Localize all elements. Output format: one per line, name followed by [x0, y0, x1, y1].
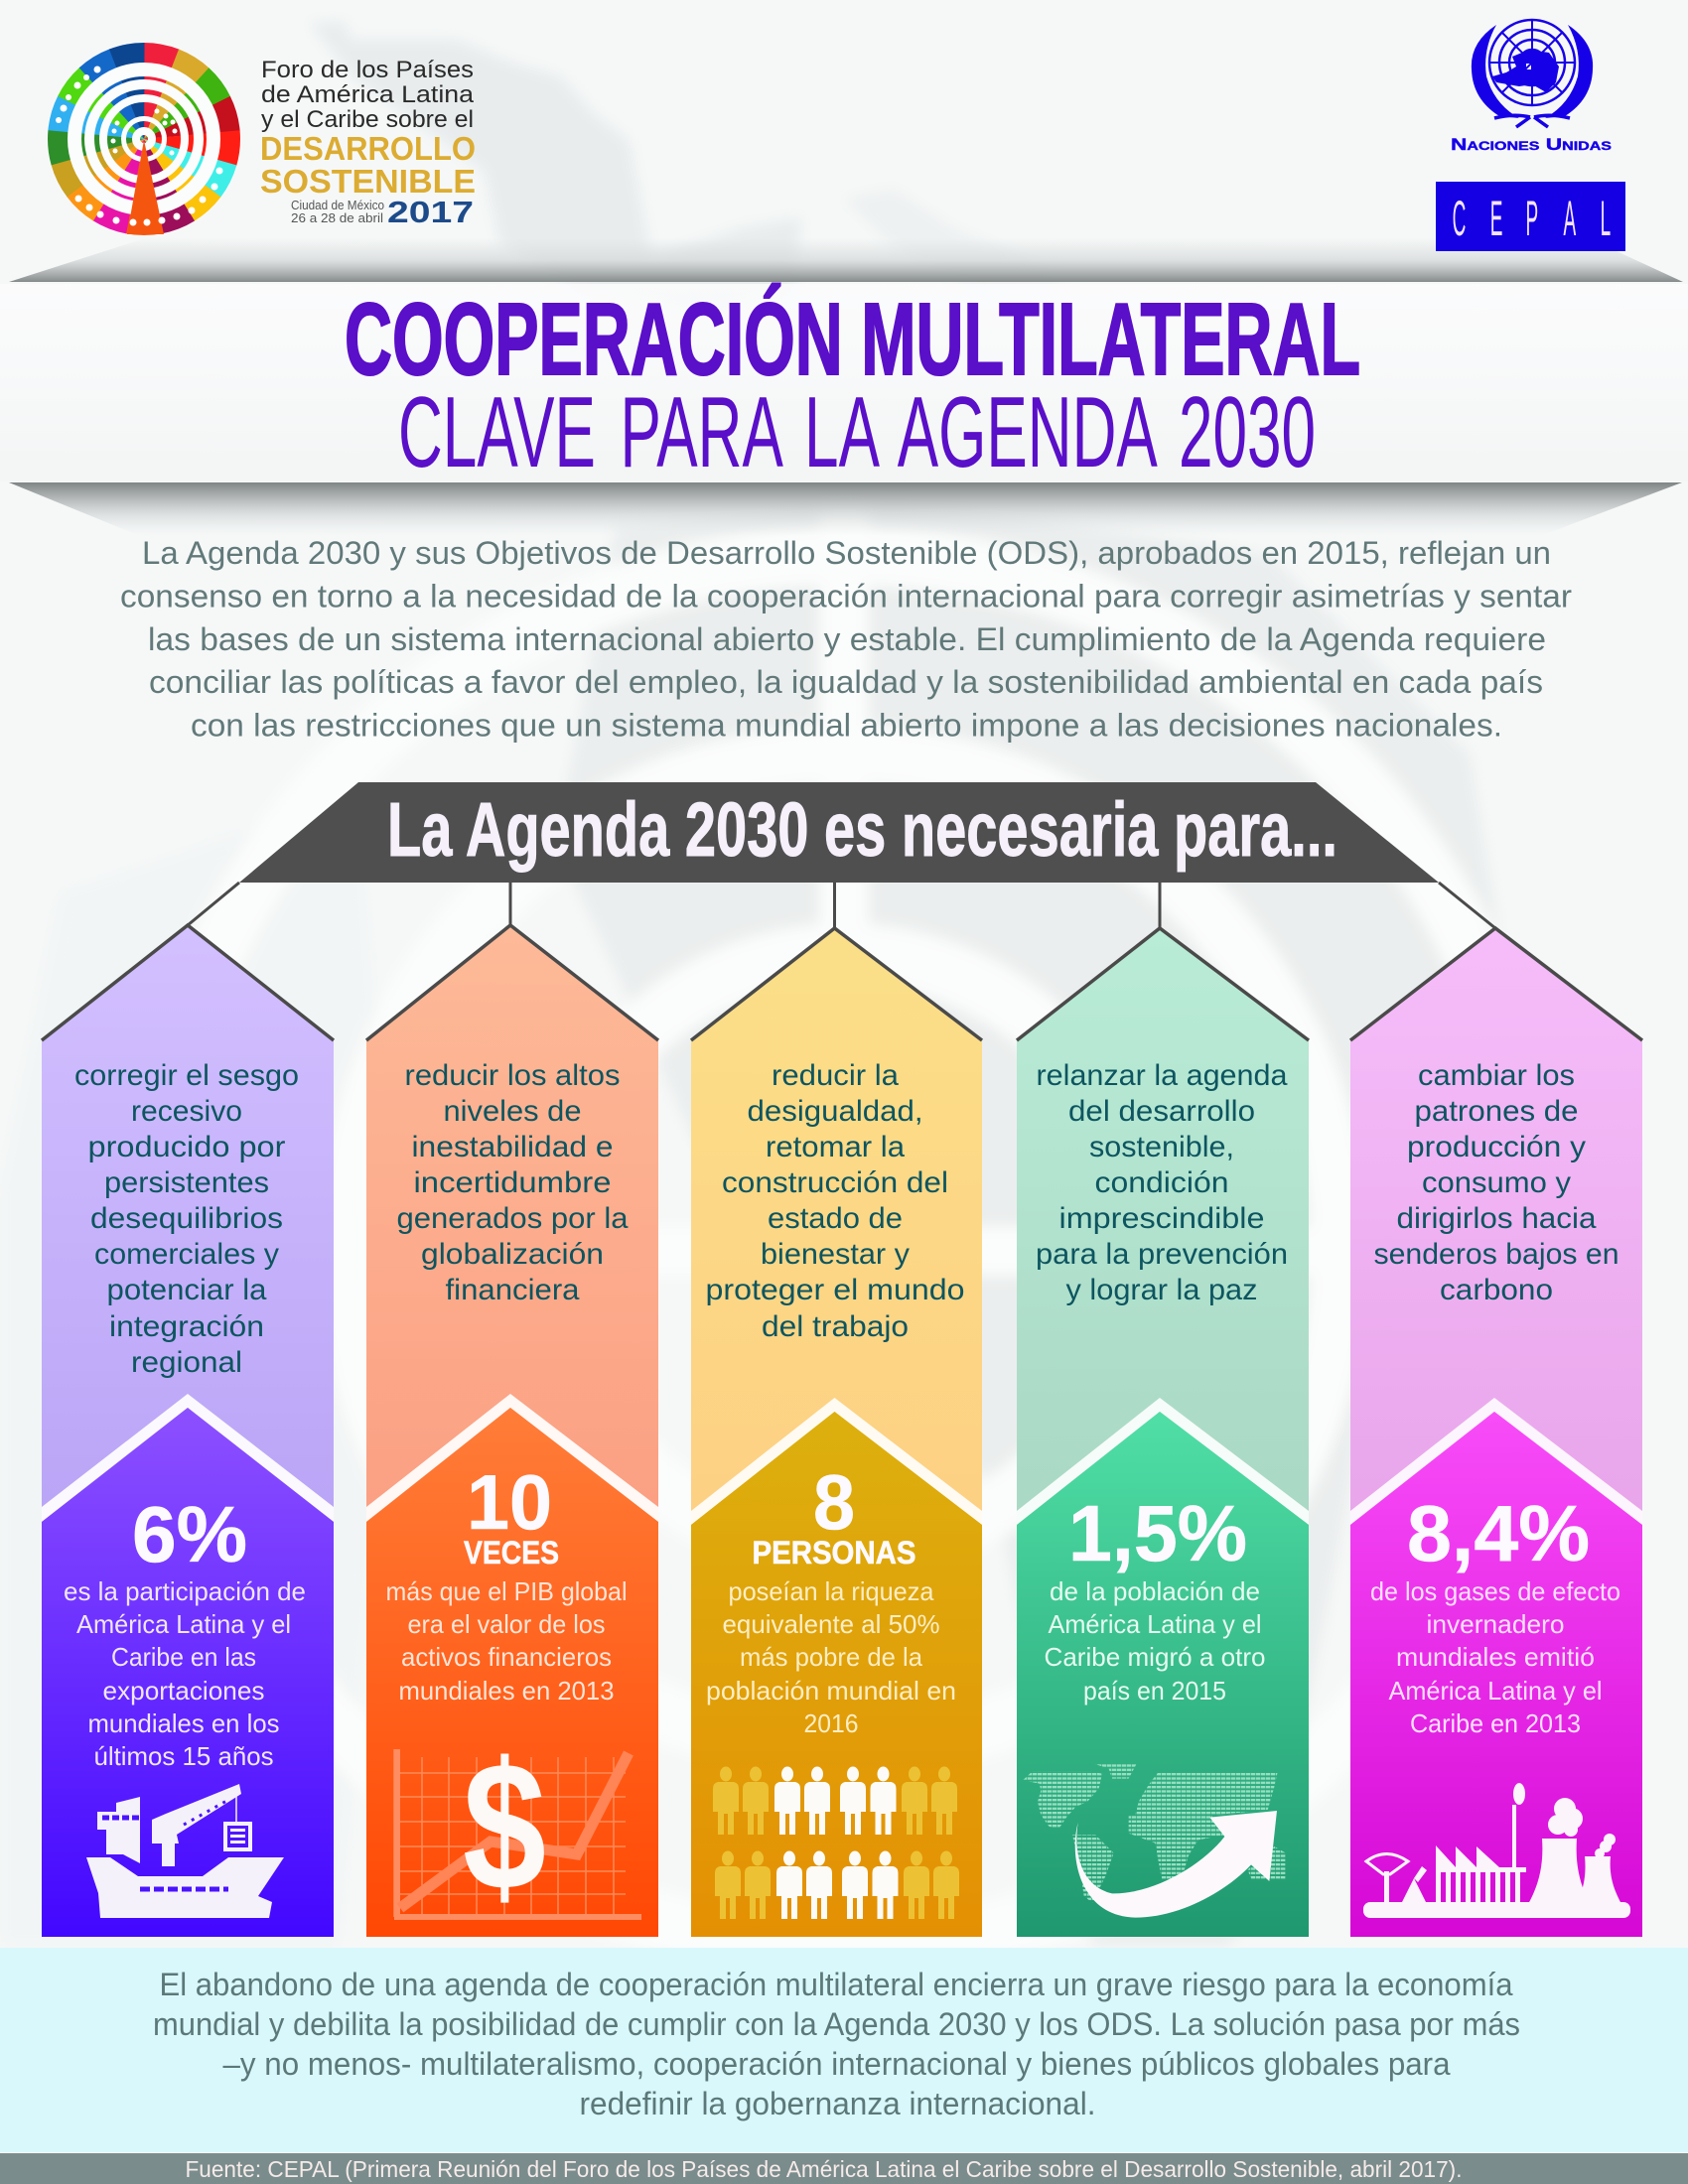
label Naciones Unidas: Naciones Unidas: [1451, 135, 1612, 154]
stat value: VECES: [464, 1535, 559, 1570]
upper text: proteger el mundo: [705, 1274, 965, 1306]
stat text: últimos 15 años: [93, 1741, 274, 1771]
stat text: es la participación de: [64, 1576, 306, 1606]
stat panel: [42, 1394, 334, 1522]
stat panel: [1350, 1398, 1642, 1525]
logo text: SOSTENIBLE: [260, 163, 476, 200]
stat text: [64, 1576, 306, 1771]
stat value: PERSONAS: [753, 1535, 915, 1570]
icon: dollar chart: [394, 1723, 641, 1928]
upper text: producción y: [1407, 1131, 1586, 1163]
logo text: DESARROLLO: [260, 130, 476, 167]
upper text: para la prevención: [1036, 1238, 1288, 1271]
intro paragraph: [120, 535, 1572, 743]
upper text: y lograr la paz: [1066, 1274, 1257, 1306]
upper text: cambiar los: [1418, 1059, 1575, 1092]
upper text: imprescindible: [1058, 1202, 1265, 1235]
upper text: del trabajo: [762, 1310, 909, 1343]
stat text: mundiales en los: [87, 1708, 280, 1738]
banner: La Agenda 2030 es necesaria para...: La Agenda 2030 es necesaria para...: [387, 787, 1337, 873]
panel: closing message: redefinir la gobernanza internacional.: [580, 2086, 1096, 2121]
intro paragraph: consenso en torno a la necesidad de la cooperación internacional para corregir asimetrías y sentar: [120, 578, 1572, 614]
upper text: [1036, 1059, 1288, 1306]
intro paragraph: conciliar las políticas a favor del empleo, la igualdad y la sostenibilidad ambiental en cada país: [149, 664, 1543, 700]
stat text: América Latina y el: [76, 1609, 291, 1639]
footer: source: Fuente: CEPAL (Primera Reunión del Foro de los Países de América Latina el Caribe sobre el Desarrollo Sostenible, abril 2017).: [185, 2156, 1462, 2182]
upper text: senderos bajos en: [1374, 1238, 1618, 1271]
upper text: potenciar la: [107, 1274, 267, 1306]
upper arrow: [691, 928, 982, 1529]
stat text: América Latina y el: [1049, 1609, 1261, 1639]
stat text: mundiales en 2013: [399, 1676, 614, 1706]
stat text: exportaciones: [103, 1676, 264, 1706]
stat text: mundiales emitió: [1396, 1642, 1595, 1672]
upper text: del desarrollo: [1068, 1095, 1255, 1128]
upper text: desequilibrios: [90, 1202, 283, 1235]
stat text: era el valor de los: [407, 1609, 606, 1639]
logo: Naciones Unidas emblem: [1451, 20, 1612, 154]
stat text: población mundial en: [706, 1676, 956, 1706]
upper text: bienestar y: [761, 1238, 910, 1271]
logo text: Foro de los Países: [261, 57, 474, 83]
panel: closing message: –y no menos- multilateralismo, cooperación internacional y bienes públicos globales para: [222, 2046, 1451, 2082]
upper text: [74, 1059, 299, 1379]
stat text: [1370, 1576, 1620, 1738]
icon: SDG wheel: [56, 66, 222, 234]
upper text: estado de: [768, 1202, 903, 1235]
logo text: Ciudad de México: [291, 198, 384, 212]
stat value: 8,4%: [1407, 1489, 1590, 1577]
upper text: [397, 1059, 629, 1306]
logo text: 26 a 28 de abril: [291, 210, 383, 225]
top shadow band: [9, 238, 1683, 282]
panel: column 1: [42, 925, 334, 1937]
connector lines: [188, 883, 1495, 928]
upper text: patrones de: [1414, 1095, 1579, 1128]
upper arrow: [1017, 928, 1309, 1529]
panel: closing message: El abandono de una agenda de cooperación multilateral encierra un grave riesgo para la economía: [159, 1967, 1513, 2002]
upper text: reducir la: [772, 1059, 899, 1092]
stat value: [753, 1458, 915, 1570]
upper text: reducir los altos: [405, 1059, 620, 1092]
stat text: equivalente al 50%: [723, 1609, 939, 1639]
stat text: Caribe migró a otro: [1045, 1642, 1265, 1672]
stat text: Caribe en 2013: [1410, 1708, 1581, 1738]
icon: ship with crane: [86, 1784, 284, 1918]
stat value: 10: [467, 1458, 552, 1546]
stat text: América Latina y el: [1388, 1676, 1603, 1706]
icon: world map with arrow: [1023, 1763, 1286, 1918]
stat text: más pobre de la: [740, 1642, 923, 1672]
logo text: de América Latina: [261, 81, 475, 108]
stat value: 1,5%: [1068, 1489, 1247, 1577]
upper text: comerciales y: [94, 1238, 279, 1271]
upper text: carbono: [1440, 1274, 1553, 1306]
stat text: de la población de: [1050, 1576, 1260, 1606]
panel: closing message: [0, 1948, 1688, 2152]
upper text: integración: [109, 1310, 264, 1343]
title band background: [0, 284, 1688, 481]
panel: closing message: mundial y debilita la posibilidad de cumplir con la Agenda 2030 y los ODS. La solución pasa por más: [153, 2006, 1520, 2042]
intro paragraph: las bases de un sistema internacional abierto y estable. El cumplimiento de la Agenda requiere: [148, 621, 1546, 657]
logo text: 2017: [387, 195, 474, 229]
logo: Foro de los Países: [56, 57, 476, 234]
stat text: de los gases de efecto: [1370, 1576, 1620, 1606]
upper text: incertidumbre: [413, 1166, 612, 1199]
upper text: niveles de: [443, 1095, 582, 1128]
logo text: [260, 57, 476, 229]
upper text: persistentes: [104, 1166, 269, 1199]
upper text: recesivo: [131, 1095, 242, 1128]
stat text: país en 2015: [1083, 1676, 1226, 1706]
intro paragraph: La Agenda 2030 y sus Objetivos de Desarrollo Sostenible (ODS), aprobados en 2015, reflejan un: [142, 535, 1551, 571]
upper text: financiera: [445, 1274, 580, 1306]
icon: dollar chart: $: [463, 1723, 546, 1928]
upper arrow: [1350, 928, 1642, 1529]
banner: La Agenda 2030 es necesaria para...: [239, 782, 1439, 883]
upper arrow: [42, 925, 334, 1529]
panel: column 2: [366, 925, 658, 1937]
upper text: producido por: [87, 1131, 286, 1163]
upper text: dirigirlos hacia: [1396, 1202, 1597, 1235]
lower shadow band: [9, 482, 1682, 536]
stat panel: [1017, 1398, 1309, 1525]
stat text: [385, 1576, 628, 1706]
logo: CEPAL box: [1436, 182, 1625, 251]
stat value: 8: [813, 1458, 855, 1546]
stat text: poseían la riqueza: [729, 1576, 934, 1606]
upper text: [705, 1059, 965, 1343]
intro paragraph: con las restricciones que un sistema mundial abierto impone a las decisiones nacionales.: [191, 707, 1502, 743]
panel: column 3: [691, 928, 982, 1937]
icon: factory: [1363, 1783, 1630, 1918]
title: [345, 282, 1360, 488]
stat text: más que el PIB global: [385, 1576, 628, 1606]
stat text: invernadero: [1426, 1609, 1565, 1639]
upper text: desigualdad,: [747, 1095, 923, 1128]
logo text: y el Caribe sobre el: [261, 106, 474, 133]
upper text: generados por la: [397, 1202, 629, 1235]
stat value: 6%: [132, 1490, 247, 1578]
stat text: [706, 1576, 956, 1738]
icon: people: [713, 1767, 959, 1919]
stat text: [1045, 1576, 1265, 1706]
upper text: inestabilidad e: [411, 1131, 614, 1163]
footer: source: [0, 2153, 1688, 2184]
upper text: construcción del: [722, 1166, 948, 1199]
upper text: regional: [131, 1346, 242, 1379]
stat text: 2016: [804, 1708, 858, 1738]
logo: CEPAL box: CEPAL: [1453, 192, 1611, 247]
upper text: relanzar la agenda: [1037, 1059, 1288, 1092]
stat panel: [691, 1398, 982, 1525]
stat text: Caribe en las: [111, 1642, 256, 1672]
upper text: globalización: [421, 1238, 604, 1271]
upper text: [1374, 1059, 1618, 1306]
upper arrow: [366, 925, 658, 1529]
stat text: activos financieros: [401, 1642, 612, 1672]
upper text: retomar la: [766, 1131, 905, 1163]
upper text: condición: [1094, 1166, 1229, 1199]
panel: column 4: [1017, 928, 1309, 1937]
stat panel: [366, 1394, 658, 1522]
upper text: consumo y: [1422, 1166, 1571, 1199]
panel: column 5: [1350, 928, 1642, 1937]
upper text: corregir el sesgo: [74, 1059, 299, 1092]
upper text: sostenible,: [1089, 1131, 1234, 1163]
